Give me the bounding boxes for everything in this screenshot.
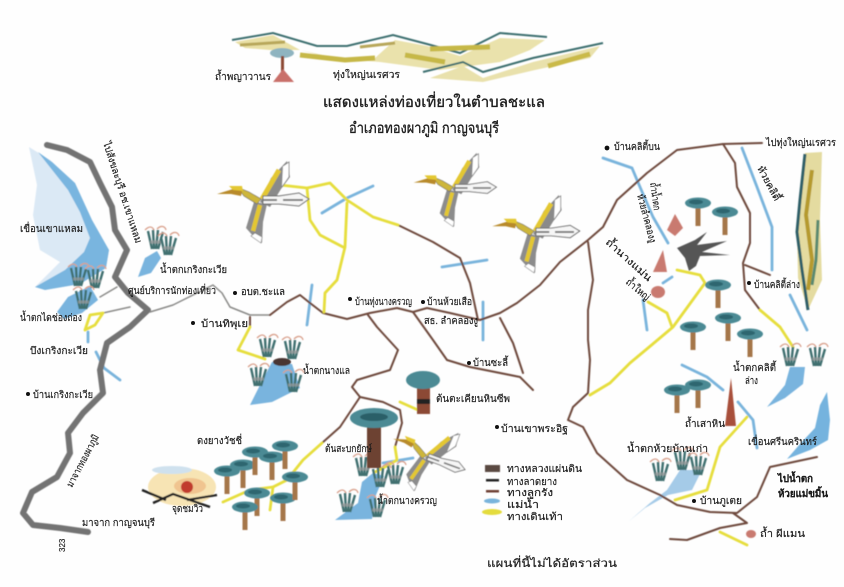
place labels: ห้วยคลิตี้ — [754, 163, 785, 204]
title — [323, 91, 545, 138]
place labels: ถ้ำนางแม่น — [603, 235, 656, 284]
icon: swallow — [677, 232, 730, 271]
title: อำเภอทองผาภูมิ กาญจนบุรี — [349, 120, 499, 138]
place labels: จุดชมวิว — [172, 504, 203, 515]
gravel and gray roads — [100, 143, 817, 540]
village markers — [26, 146, 751, 503]
place labels: น้ำตกไดช่องถ่อง — [20, 310, 82, 324]
viewpoint sunset — [142, 466, 217, 507]
place labels: บ้านคลิตี้บน — [614, 139, 660, 153]
place labels: ถ้ำเสาหิน — [685, 416, 725, 430]
place labels: บึงเกริงกะเวีย — [30, 345, 88, 357]
legend labels: ทางลูกรัง — [507, 488, 553, 499]
place labels: ต้นสะบกยักษ์ — [325, 443, 372, 455]
place labels: ถ้ำน้ำตก — [647, 181, 665, 211]
place labels: เขื่อนเขาแหลม — [20, 221, 83, 235]
legend labels: แม่น้ำ — [507, 497, 539, 511]
legend swatches — [482, 465, 502, 515]
highway 323 — [23, 145, 148, 532]
legend labels: ทางหลวงแผ่นดิน — [507, 464, 582, 475]
place labels: ถ้ำ ผีแมน — [760, 526, 805, 540]
place labels — [20, 69, 837, 552]
place labels: ห้วยลำคลองงู — [634, 193, 659, 244]
caves and rock spire — [651, 214, 756, 538]
callout: to Huai Mae Khamin waterfall: ไปน้ำตก — [777, 471, 813, 485]
place labels: ไปสังขละบุรี อช.เขาแหลม — [100, 139, 144, 245]
place labels: ศูนย์บริการนักท่องเที่ยว — [128, 283, 216, 297]
waterfall pools — [57, 251, 805, 522]
place labels: บ้านซะลี้ — [473, 355, 509, 369]
place labels: น้ำตกนางแล — [303, 363, 350, 377]
place labels: ทุ่งใหญ่นเรศวร — [333, 69, 401, 81]
foot trails — [85, 183, 793, 545]
place labels: น้ำตกเกริงกะเวีย — [160, 262, 227, 276]
place labels: ถ้ำพญาวานร — [215, 69, 272, 83]
place labels: บ้านห้วยเสือ — [427, 296, 472, 308]
place labels: ต้นตะเคียนหินซีพ — [436, 393, 510, 405]
lake: Srinakarin dam — [787, 392, 830, 459]
rivers — [88, 148, 807, 463]
place labels: มาจากทองผาภูมิ — [65, 433, 102, 489]
place labels: บ้านภูเตย — [700, 495, 742, 507]
place labels: เขื่อนศรีนครินทร์ — [748, 434, 818, 448]
forest trees — [214, 198, 763, 530]
legend labels: ทางลาดยาง — [507, 477, 557, 488]
big trees — [350, 371, 440, 468]
place labels: ดงยางวัชชี่ — [197, 433, 242, 447]
place labels: ถ้ำใหญ่ — [623, 275, 654, 303]
place labels: 323 — [58, 538, 67, 552]
place labels: น้ำตกห้วยบ้านเก่า — [627, 441, 708, 455]
callout: to Huai Mae Khamin waterfall — [777, 471, 828, 500]
place labels: บ้านเขาพระอิฐ — [501, 423, 568, 435]
place labels: น้ำตกนางครวญ — [377, 493, 437, 507]
place labels: น้ำตกคลิตี้ — [733, 360, 777, 374]
note: map not to scale: แผนที่นี้ไม่ได้อัตราส่วน — [487, 555, 618, 570]
place labels: อบต.ชะแล — [241, 287, 285, 298]
hornbills — [217, 153, 580, 505]
place labels: ล่าง — [745, 376, 758, 387]
title: แสดงแหล่งท่องเที่ยวในตำบลชะแล — [323, 91, 545, 111]
place labels: มาจาก กาญจนบุรี — [82, 517, 156, 529]
Phaya Wanon cave tree — [270, 48, 294, 82]
place labels: บ้านคลิตี้ล่าง — [754, 277, 800, 291]
callout: to Huai Mae Khamin waterfall: ห้วยแม่ขมิ้น — [778, 486, 828, 500]
place labels: บ้านทุ่งนางครวญ — [355, 296, 412, 308]
legend labels — [507, 464, 582, 523]
top mountains — [232, 33, 603, 82]
place labels: บ้านทิพุเย — [201, 318, 248, 330]
place labels: สธ. ลำคลองงู — [424, 316, 478, 327]
legend labels: ทางเดินเท้า — [507, 511, 563, 523]
waterfall plants — [68, 226, 828, 517]
lake: Khao Laem dam — [29, 147, 109, 290]
place labels: ไปทุ่งใหญ่นเรศวร — [765, 137, 837, 149]
right mountain ridge — [797, 152, 822, 310]
place labels: บ้านเกริงกะเวีย — [33, 389, 93, 401]
